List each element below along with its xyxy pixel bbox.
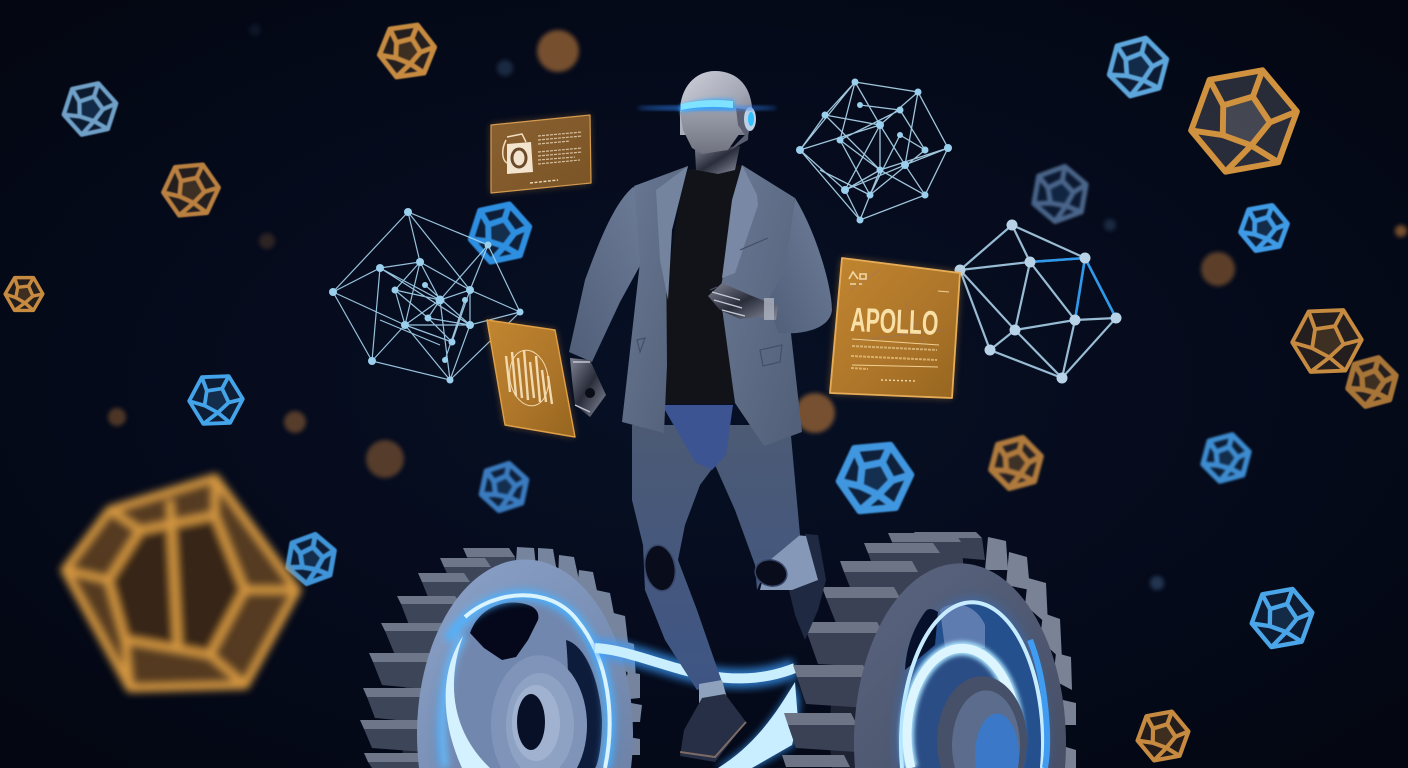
left jacket panel xyxy=(622,166,688,433)
left gear extruded teeth xyxy=(360,548,520,768)
gold card: APOLLO xyxy=(830,258,960,398)
back shoe xyxy=(789,534,826,640)
back lower leg xyxy=(760,535,818,590)
left gear hub xyxy=(491,655,587,768)
glowing light ribbon xyxy=(595,648,800,768)
network mesh: right sphere xyxy=(954,220,1122,384)
right gear extruded teeth xyxy=(782,532,985,767)
knee joint: left xyxy=(641,543,679,593)
helmet xyxy=(637,71,777,154)
blue wireframe polyhedra xyxy=(60,31,1318,656)
network mesh: left xyxy=(329,208,524,384)
robot right hand xyxy=(708,283,778,320)
gold card: padlock document xyxy=(491,115,591,193)
right sleeve xyxy=(768,198,832,333)
right gear inner bright ring xyxy=(904,645,1020,768)
visor glow xyxy=(637,106,777,110)
out-of-focus blue specks xyxy=(249,24,1164,590)
knee joint: right xyxy=(752,556,790,590)
network mesh: top right xyxy=(796,78,952,224)
left gear inner disc and ring glow xyxy=(440,598,610,768)
robot figure xyxy=(569,71,832,762)
left gear glowing ring xyxy=(448,595,610,768)
left gear xyxy=(360,547,642,768)
large blurred orange polyhedron xyxy=(65,478,297,688)
right gear xyxy=(782,532,1076,768)
robot left hand xyxy=(570,358,606,417)
ear light xyxy=(744,107,756,131)
jacket details xyxy=(637,238,782,366)
neck xyxy=(695,146,740,174)
right gear hub xyxy=(937,676,1027,768)
right gear small front teeth xyxy=(985,537,1076,768)
right gear ring glow xyxy=(900,601,1044,768)
left sleeve xyxy=(569,187,660,362)
left lapel xyxy=(656,166,688,300)
turtleneck xyxy=(663,165,743,404)
left gear small front teeth xyxy=(515,547,642,755)
right lapel xyxy=(722,165,758,278)
gold card: chart xyxy=(487,320,575,437)
right jacket panel xyxy=(720,165,802,446)
left gear spoke openings xyxy=(470,602,538,660)
front shoe xyxy=(680,680,746,762)
out-of-focus orange bokeh orbs xyxy=(108,30,1407,478)
APOLLO title: APOLLO xyxy=(850,301,939,343)
trousers xyxy=(632,405,800,690)
